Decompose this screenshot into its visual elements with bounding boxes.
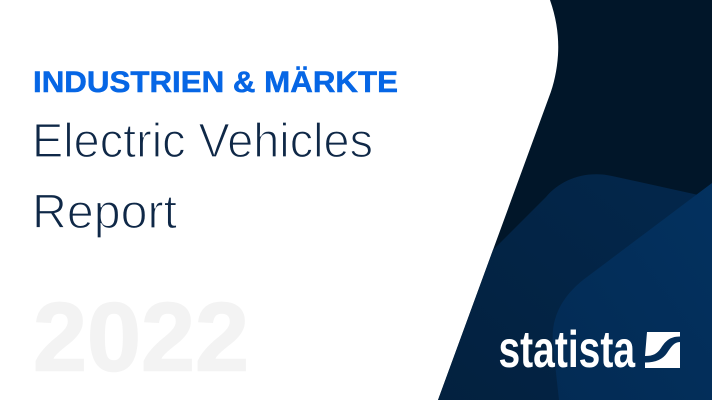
logo icon <box>645 332 680 368</box>
decorative shape: mid-blue <box>438 174 712 400</box>
wordmark: statista <box>498 321 636 379</box>
title line 2: Report <box>32 186 177 239</box>
category heading: INDUSTRIEN & MÄRKTE <box>33 66 398 99</box>
panel: dark navy shape <box>438 0 712 400</box>
statista logo <box>498 321 680 379</box>
report title <box>32 115 373 239</box>
year watermark: 2022 <box>33 282 249 392</box>
title line 1: Electric Vehicles <box>32 115 373 168</box>
decorative shape: lighter blue <box>553 183 712 400</box>
